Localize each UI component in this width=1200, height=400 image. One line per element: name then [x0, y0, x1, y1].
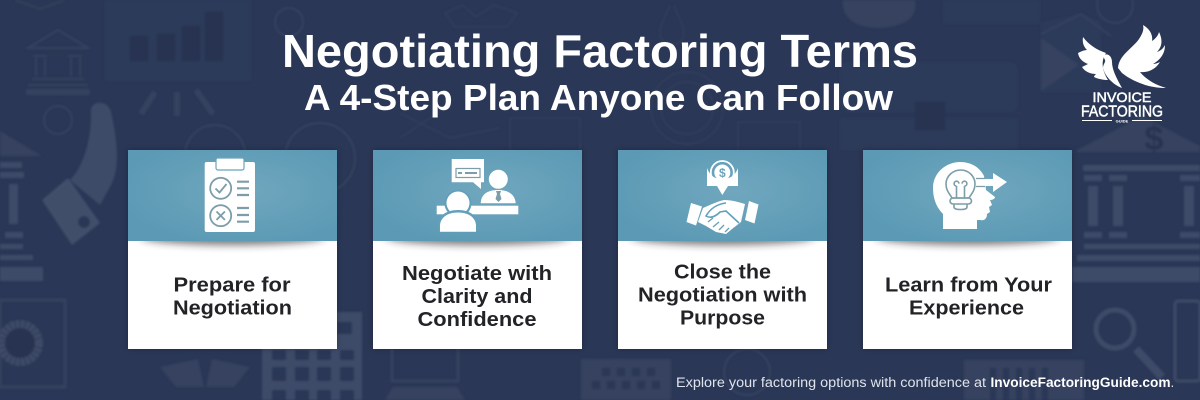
panel body: step 3: [618, 241, 827, 349]
logo wordmark: [1081, 89, 1163, 124]
panel: step 1: [128, 150, 337, 349]
label: Negotiate with Clarity and Confidence: Negotiate with: [402, 262, 552, 285]
label: Learn from Your Experience: [885, 274, 1052, 320]
label: Close the Negotiation with Purpose: Close the: [674, 260, 771, 284]
panel: step 2: [373, 150, 582, 349]
label: Prepare for Negotiation: Negotiation: [173, 296, 292, 320]
panel body: step 1: [128, 241, 337, 349]
label: Close the Negotiation with Purpose: Purpose: [680, 306, 765, 330]
footer text: InvoiceFactoringGuide.com: [990, 375, 1170, 390]
panel: step 3: [618, 150, 827, 349]
background pattern of finance icons: $: [1145, 120, 1164, 158]
panel body: step 2: [373, 241, 582, 349]
panel header: step 2: [373, 150, 582, 241]
panel: step 4: [863, 150, 1072, 349]
logo: Invoice Factoring Guide: [1078, 25, 1166, 124]
panel header: step 4: [863, 150, 1072, 241]
footer text: [676, 375, 1174, 390]
label: Close the Negotiation with Purpose: Negotiation with: [638, 284, 807, 306]
label: Learn from Your Experience: Learn from Your: [885, 274, 1052, 296]
heading line two: A 4-Step Plan Anyone Can Follow: [304, 77, 894, 118]
label: Negotiate with Clarity and Confidence: Clarity and: [422, 285, 532, 308]
icon: clipboard checklist: [205, 158, 255, 232]
label: Prepare for Negotiation: Prepare for: [174, 274, 291, 296]
panel header: step 3: [618, 150, 827, 241]
footer text: .: [1170, 375, 1174, 390]
logo wordmark: FACTORING: [1081, 104, 1163, 120]
title: [282, 25, 918, 118]
label: Learn from Your Experience: Experience: [909, 296, 1024, 320]
logo wordmark: INVOICE: [1092, 89, 1152, 105]
icon: two people meeting at a desk: [437, 159, 518, 232]
icon: handshake with dollar pin: $: [719, 166, 726, 180]
label: Negotiate with Clarity and Confidence: [402, 262, 552, 331]
logo wordmark: GUIDE: [1116, 118, 1129, 124]
label: Close the Negotiation with Purpose: [638, 260, 807, 330]
heading line one: Negotiating Factoring Terms: [282, 25, 918, 77]
label: Prepare for Negotiation: [173, 274, 292, 320]
panel header: step 1: [128, 150, 337, 241]
panel body: step 4: [863, 241, 1072, 349]
icon: handshake with dollar pin: [686, 161, 758, 234]
footer text: Explore your factoring options with confidence at: [676, 375, 986, 390]
icon: head with lightbulb and arrow: [933, 162, 1007, 229]
label: Negotiate with Clarity and Confidence: Confidence: [418, 308, 536, 331]
icon: eagle: [1078, 25, 1166, 88]
